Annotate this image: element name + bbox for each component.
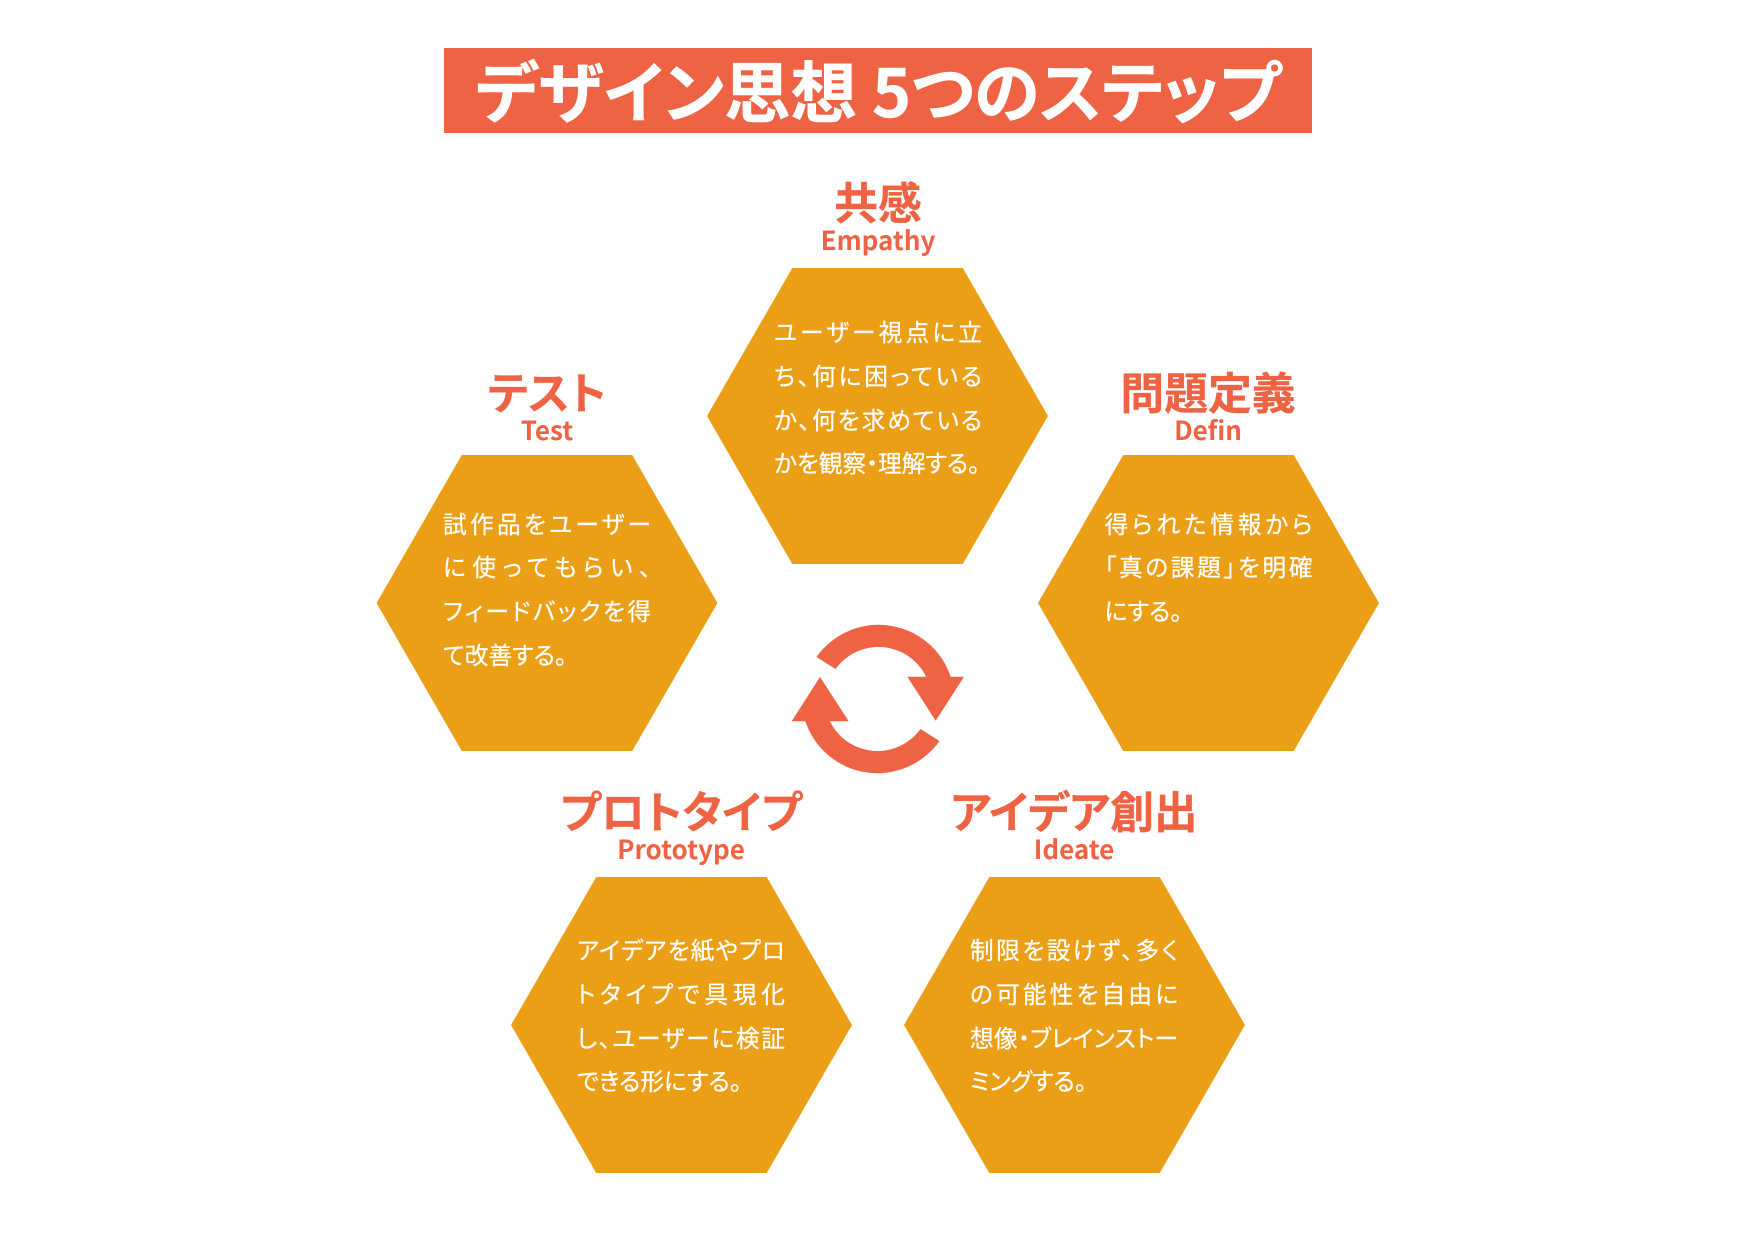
text: empathy description: ユーザー視点に立 (774, 314, 982, 348)
panel: define hexagon (1038, 455, 1379, 751)
text: test description: て改善する。 (443, 637, 567, 671)
panel: test heading: Test (521, 411, 573, 448)
text: ideate description: 制限を設けず、多く (970, 932, 1178, 966)
panel: ideate hexagon (904, 877, 1245, 1173)
text: prototype description: アイデアを紙やプロ (577, 932, 785, 966)
text: define description: にする。 (1104, 593, 1182, 627)
panel: ideate heading: アイデア創出 (950, 777, 1198, 841)
panel: prototype hexagon (511, 877, 852, 1173)
text: ideate description (970, 932, 1178, 1097)
panel: test hexagon (376, 455, 718, 751)
text: empathy description: ち、何に困っている (774, 358, 982, 392)
text: prototype description: できる形にする。 (577, 1063, 742, 1097)
text: ideate description: の可能性を自由に (970, 976, 1178, 1010)
panel: prototype heading: Prototype (617, 830, 745, 867)
text: prototype description: トタイプで具現化 (577, 976, 785, 1010)
text: prototype description: し、ユーザーに検証 (577, 1020, 785, 1054)
text: define description (1104, 506, 1312, 627)
panel: define heading: 問題定義 (1120, 358, 1296, 422)
text: empathy description: か、何を求めている (774, 402, 982, 436)
panel: prototype heading: プロトタイプ (560, 777, 802, 841)
text: test description (443, 506, 651, 671)
text: define description: 「真の課題」を明確 (1104, 549, 1312, 583)
text: prototype description (577, 932, 785, 1097)
text: ideate description: ミングする。 (970, 1063, 1087, 1097)
text: define description: 得られた情報から (1104, 506, 1312, 540)
text: empathy description: かを観察・理解する。 (774, 445, 980, 479)
panel: define heading: Defin (1174, 411, 1242, 448)
text: test description: に使ってもらい、 (443, 549, 651, 583)
panel: ideate heading: Ideate (1034, 830, 1114, 867)
panel: empathy heading (821, 168, 935, 258)
text: test description: 試作品をユーザー (443, 506, 651, 540)
text: test description: フィードバックを得 (443, 593, 651, 627)
panel: empathy hexagon (707, 268, 1048, 564)
title: デザイン思想 5つのステップ (475, 41, 1281, 137)
text: empathy description (774, 314, 982, 479)
panel: empathy heading: 共感 (834, 168, 922, 232)
icon: cycle arrows (792, 624, 964, 774)
panel: empathy heading: Empathy (821, 221, 935, 258)
panel: test heading: テスト (488, 358, 606, 422)
text: ideate description: 想像・ブレインストー (970, 1020, 1178, 1054)
